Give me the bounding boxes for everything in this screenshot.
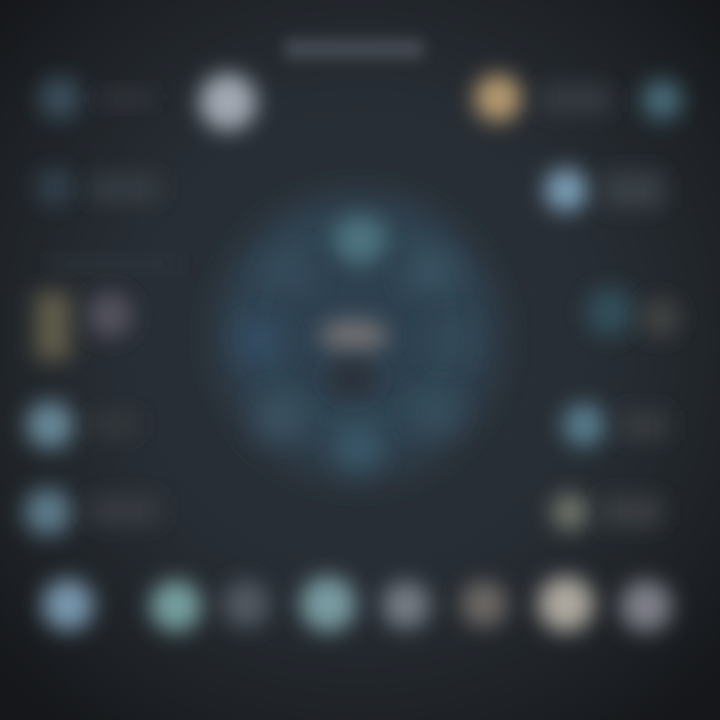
icon: left row 5 xyxy=(24,488,72,536)
globe centre shadow xyxy=(326,358,378,398)
icon: right row 4 xyxy=(551,493,589,531)
icon: bottom 7 xyxy=(538,576,594,632)
globe node: left xyxy=(238,318,282,362)
globe node: bottom xyxy=(336,426,380,470)
chart bar: left xyxy=(35,292,71,360)
globe node: upper left xyxy=(264,252,312,292)
icon: right row 3 xyxy=(562,403,606,447)
icon: bottom 2 xyxy=(150,580,202,632)
icon: bottom 4 xyxy=(300,576,356,632)
icon: right row 2b xyxy=(640,298,680,338)
icon: bottom 3 xyxy=(222,580,270,628)
title xyxy=(284,39,424,59)
right column xyxy=(544,168,680,531)
icon: top left xyxy=(39,77,81,119)
icon: left row 4 xyxy=(26,401,74,449)
text block: right row 1 xyxy=(602,172,664,208)
text block: top left xyxy=(98,90,153,106)
icon: left row 1 xyxy=(36,168,74,206)
bottom row icons xyxy=(42,576,672,632)
icon: top centre left xyxy=(199,73,257,131)
icon: bottom 1 xyxy=(42,579,94,631)
icon: right row 1 xyxy=(544,168,588,212)
central globe xyxy=(213,193,503,483)
text block: left row 5 xyxy=(90,495,160,525)
globe node: lower right xyxy=(412,390,460,434)
globe node: upper right xyxy=(406,252,454,292)
icon: bottom 5 xyxy=(382,581,430,629)
globe node: lower left xyxy=(256,396,304,440)
icon: bottom 8 xyxy=(620,580,672,632)
globe node: top xyxy=(334,216,386,264)
globe node: right xyxy=(428,318,472,362)
left column xyxy=(24,168,180,536)
globe node: centre label xyxy=(320,319,388,353)
icon: top centre right xyxy=(474,74,522,122)
icon: left row 3 xyxy=(87,292,133,338)
text block: left row 1 xyxy=(90,175,160,201)
text block: right row 4 xyxy=(600,495,662,527)
icon: right row 2 xyxy=(585,287,635,337)
text block: left row 4 xyxy=(92,412,137,436)
text block: top right xyxy=(540,85,610,113)
icon: top right xyxy=(642,80,682,120)
icon: bottom 6 xyxy=(461,581,507,627)
top row icons xyxy=(39,73,682,131)
text block: left row 2 xyxy=(50,258,180,270)
text block: right row 3 xyxy=(618,410,668,440)
globe disc xyxy=(213,193,503,483)
